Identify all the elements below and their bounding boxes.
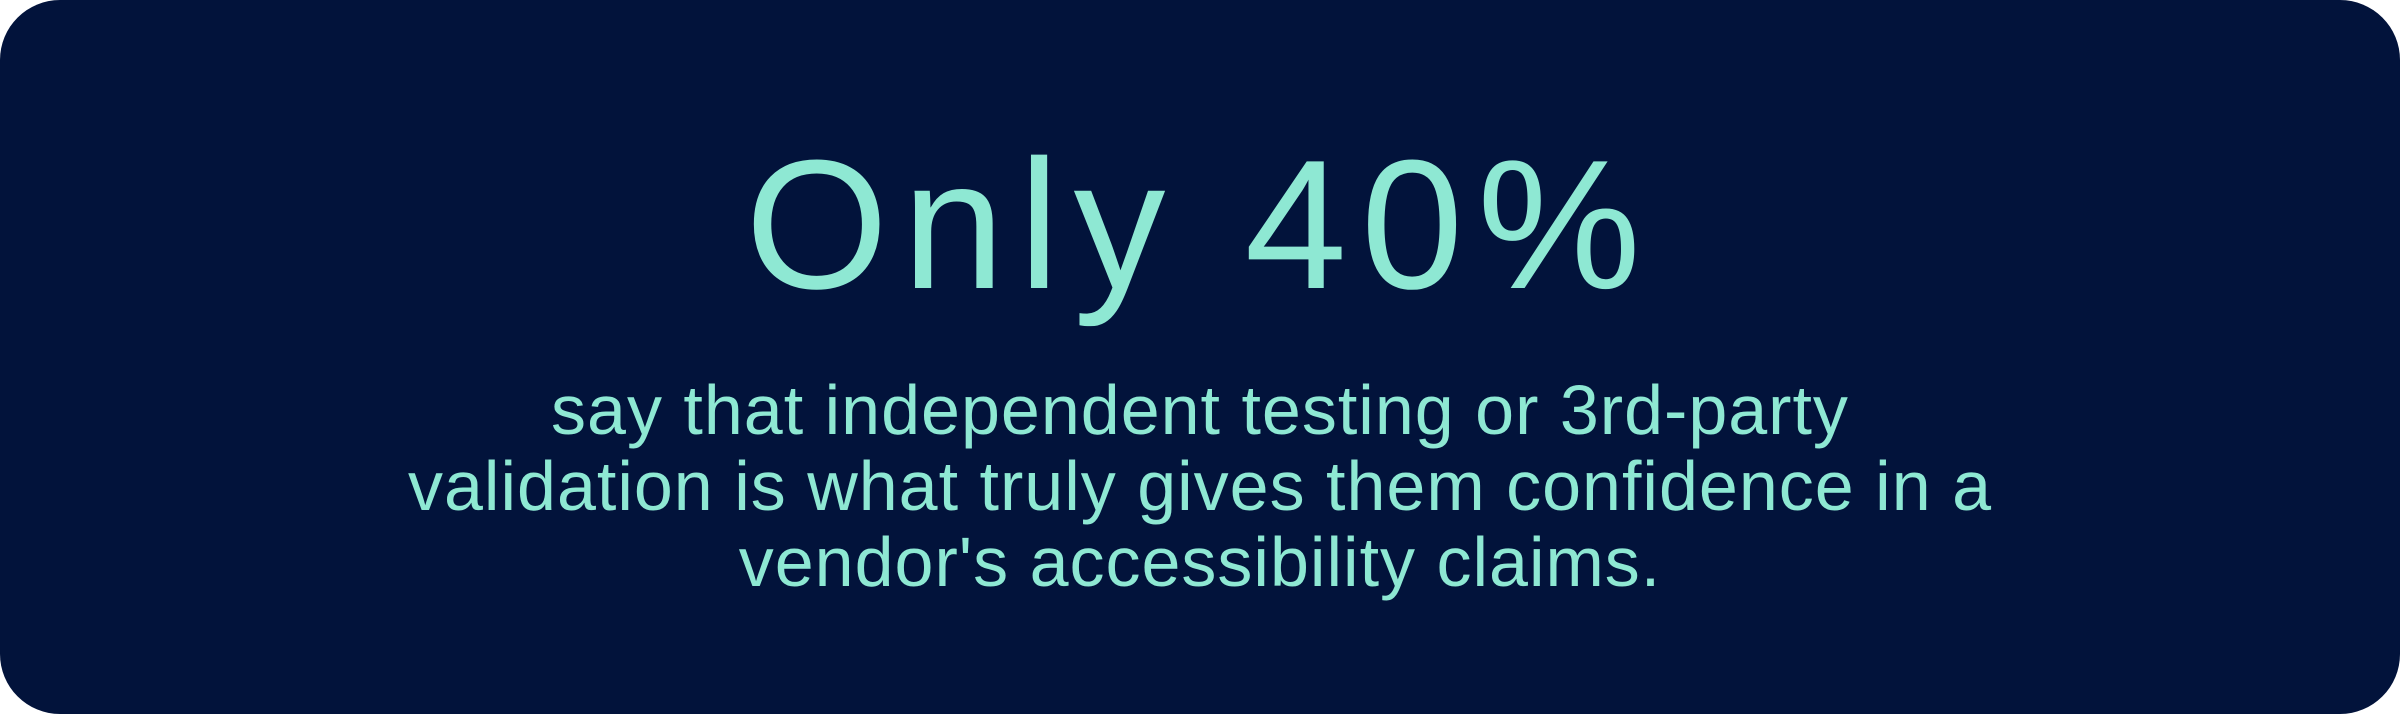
description text: [408, 371, 1992, 601]
description text: vendor's accessibility claims.: [739, 523, 1661, 601]
description text: validation is what truly gives them confidence in a: [408, 447, 1992, 525]
headline stat: Only 40%: [745, 121, 1655, 327]
description text: say that independent testing or 3rd-party: [551, 371, 1849, 449]
